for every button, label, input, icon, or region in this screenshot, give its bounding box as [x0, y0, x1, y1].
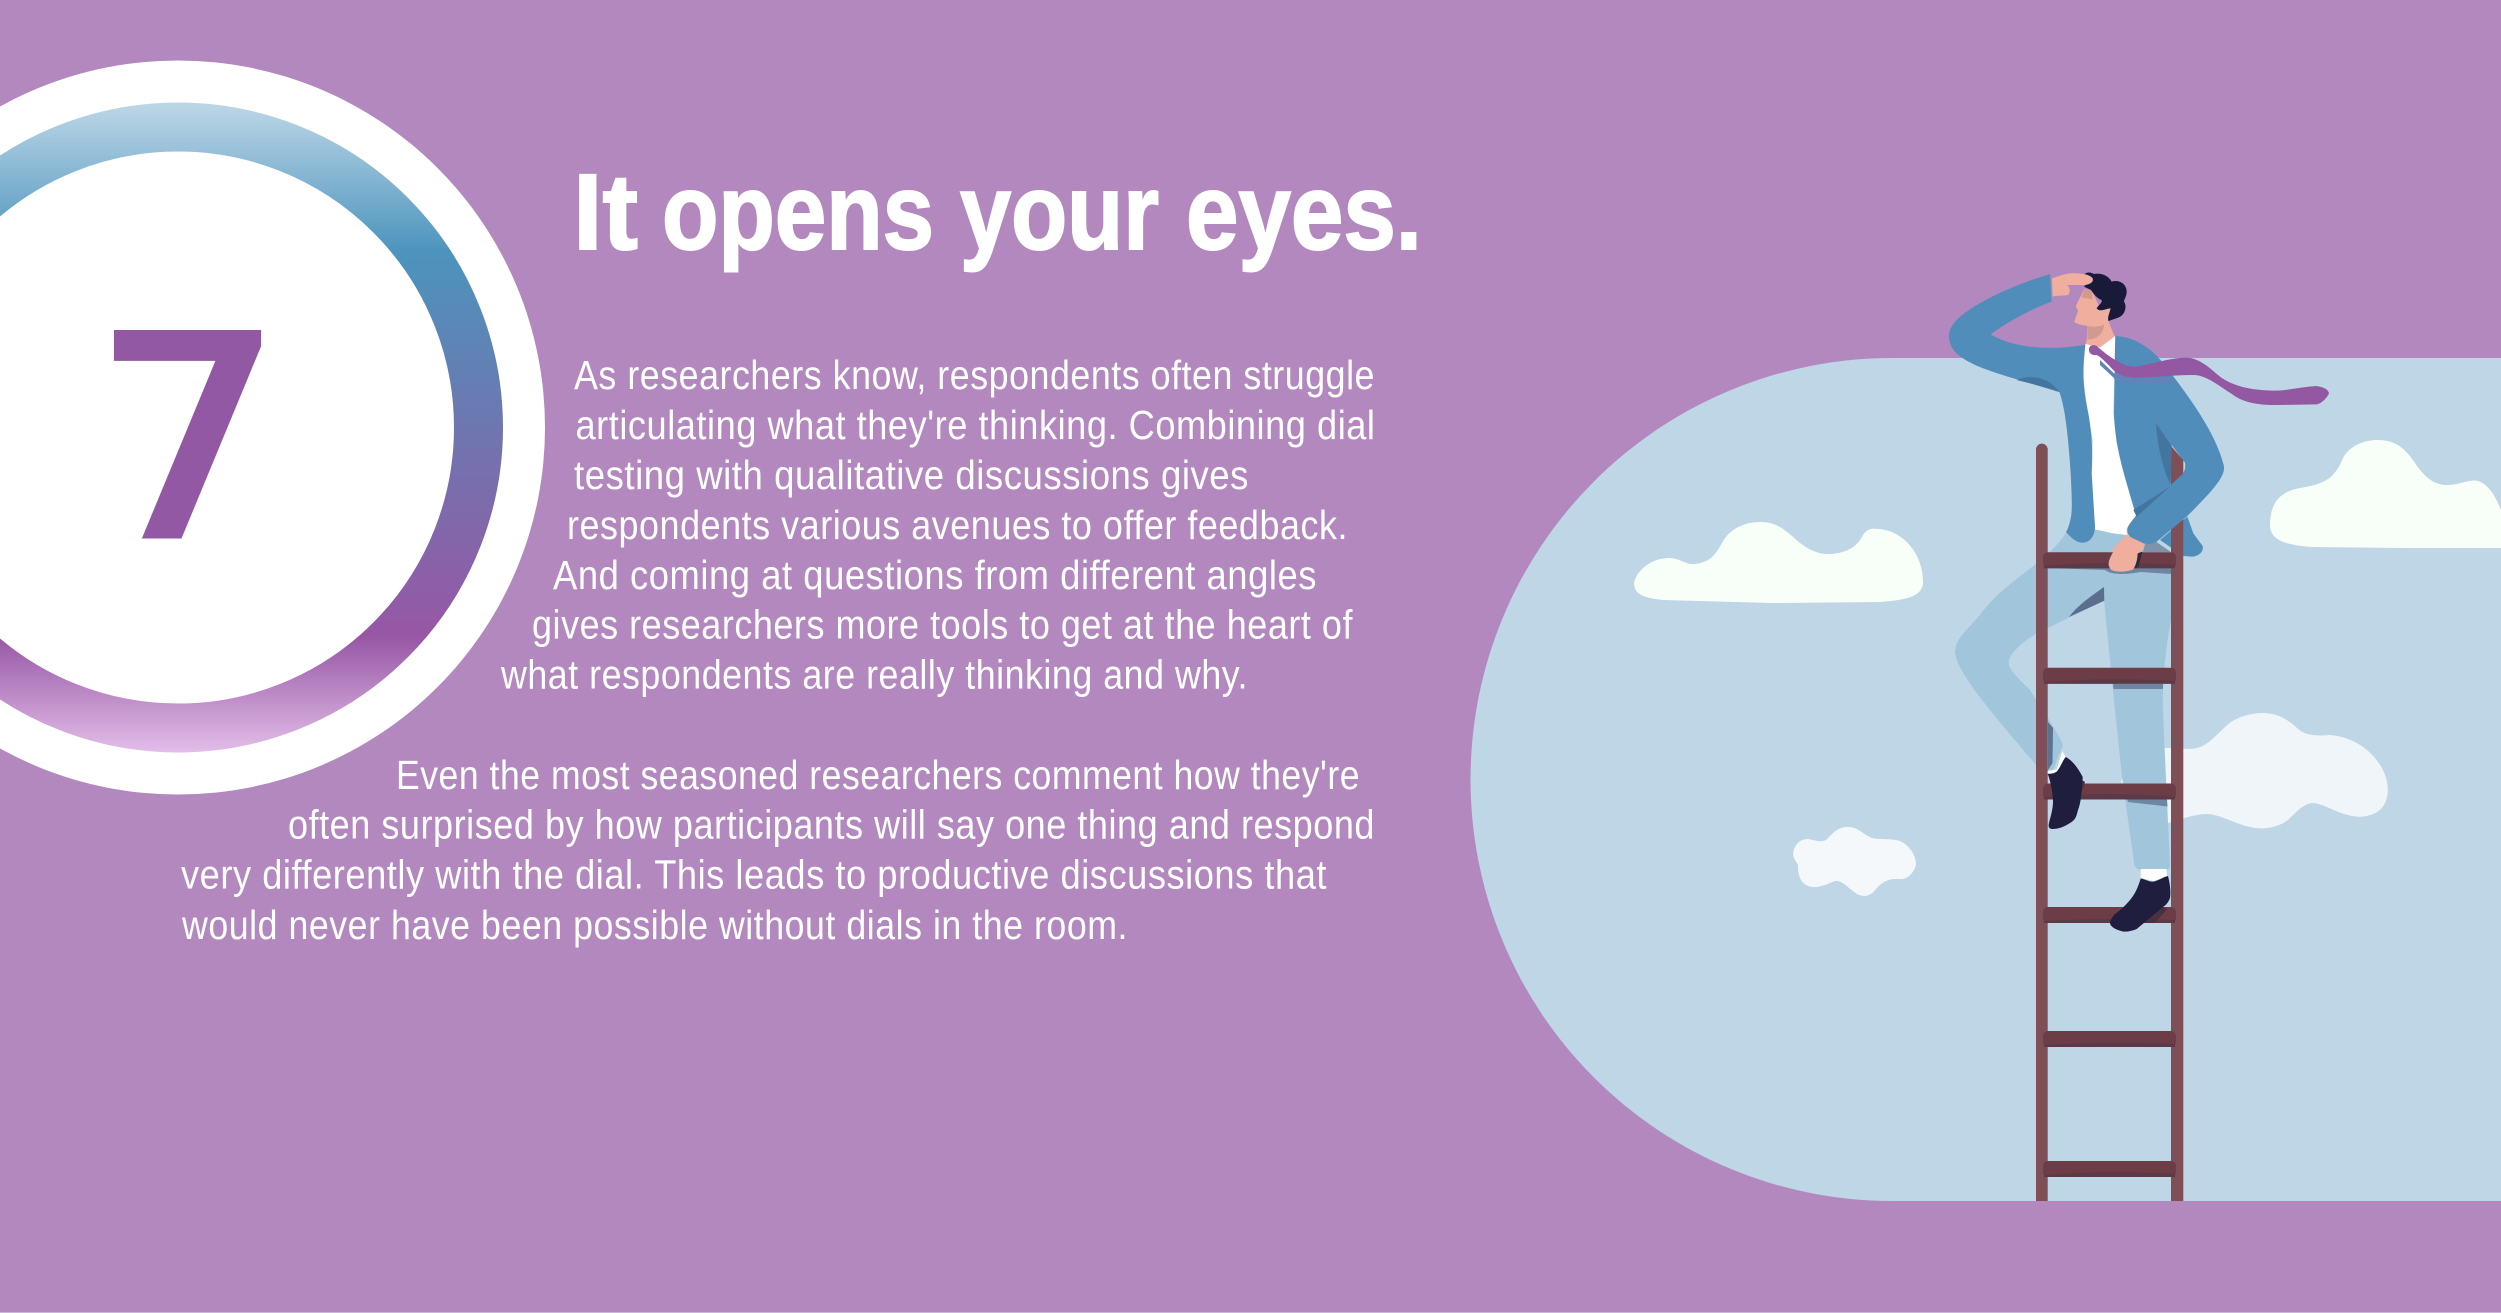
- neck: [2085, 321, 2115, 350]
- thumb shadow: [2134, 552, 2142, 568]
- jacket tail: [2160, 517, 2203, 557]
- hand on rung: [2109, 535, 2145, 572]
- number 7: 7: [94, 280, 282, 600]
- title: opens: [662, 151, 934, 272]
- title: eyes.: [1186, 151, 1422, 272]
- first paragraph: respondents various avenues to offer feedback.: [567, 502, 1348, 548]
- sleeve shadow: [2017, 377, 2059, 392]
- ladder: [2036, 444, 2183, 1201]
- jacket left with raised sleeve: [1949, 274, 2095, 543]
- second paragraph: [181, 752, 1375, 948]
- first paragraph: what respondents are really thinking and why.: [500, 652, 1248, 698]
- socks and shoes: [2048, 751, 2170, 932]
- hair: [2084, 272, 2127, 321]
- face: [2074, 289, 2111, 326]
- title: [573, 151, 1422, 272]
- rung shadow: [2047, 568, 2171, 574]
- second paragraph: very differently with the dial. This leads to productive discussions that: [181, 852, 1327, 898]
- second paragraph: Even the most seasoned researchers comment how they're: [396, 752, 1360, 798]
- shirt: [2083, 336, 2137, 535]
- illustration: man on ladder in the sky: [1471, 272, 2501, 1201]
- sky panel: [1471, 358, 2501, 1201]
- front leg: [2066, 529, 2171, 872]
- cloud left: [1634, 522, 1923, 603]
- second paragraph: would never have been possible without dials in the room.: [181, 902, 1128, 948]
- neck shadow: [2087, 325, 2104, 339]
- cloud behind ladder: [2121, 713, 2388, 828]
- back leg: [1955, 533, 2104, 773]
- cloud right: [2270, 440, 2501, 548]
- raised hand: [2052, 273, 2093, 297]
- tie shadow: [2100, 360, 2177, 385]
- inner arm shadows: [2133, 423, 2172, 517]
- first paragraph: [500, 352, 1376, 698]
- title: It: [573, 151, 638, 272]
- tie: [2089, 345, 2329, 405]
- businessman upper body: [1949, 272, 2329, 572]
- gradient ring: [0, 127, 478, 728]
- ladder rungs: [2043, 552, 2176, 1177]
- badge white disc: [0, 60, 545, 794]
- first paragraph: testing with qualitative discussions gives: [574, 452, 1249, 498]
- first paragraph: As researchers know, respondents often struggle: [574, 352, 1375, 398]
- cloud small: [1793, 827, 1916, 896]
- title: your: [960, 151, 1159, 272]
- first paragraph: gives researchers more tools to get at the heart of: [532, 602, 1353, 648]
- brow shadow: [2082, 290, 2093, 299]
- first paragraph: articulating what they're thinking. Combining dial: [576, 402, 1376, 448]
- jacket right with bent arm: [2114, 336, 2224, 544]
- number badge: [0, 60, 545, 794]
- body text: [181, 352, 1376, 948]
- second paragraph: often surprised by how participants will say one thing and respond: [288, 802, 1375, 848]
- ladder rails: [2036, 444, 2183, 1201]
- first paragraph: And coming at questions from different angles: [553, 552, 1317, 598]
